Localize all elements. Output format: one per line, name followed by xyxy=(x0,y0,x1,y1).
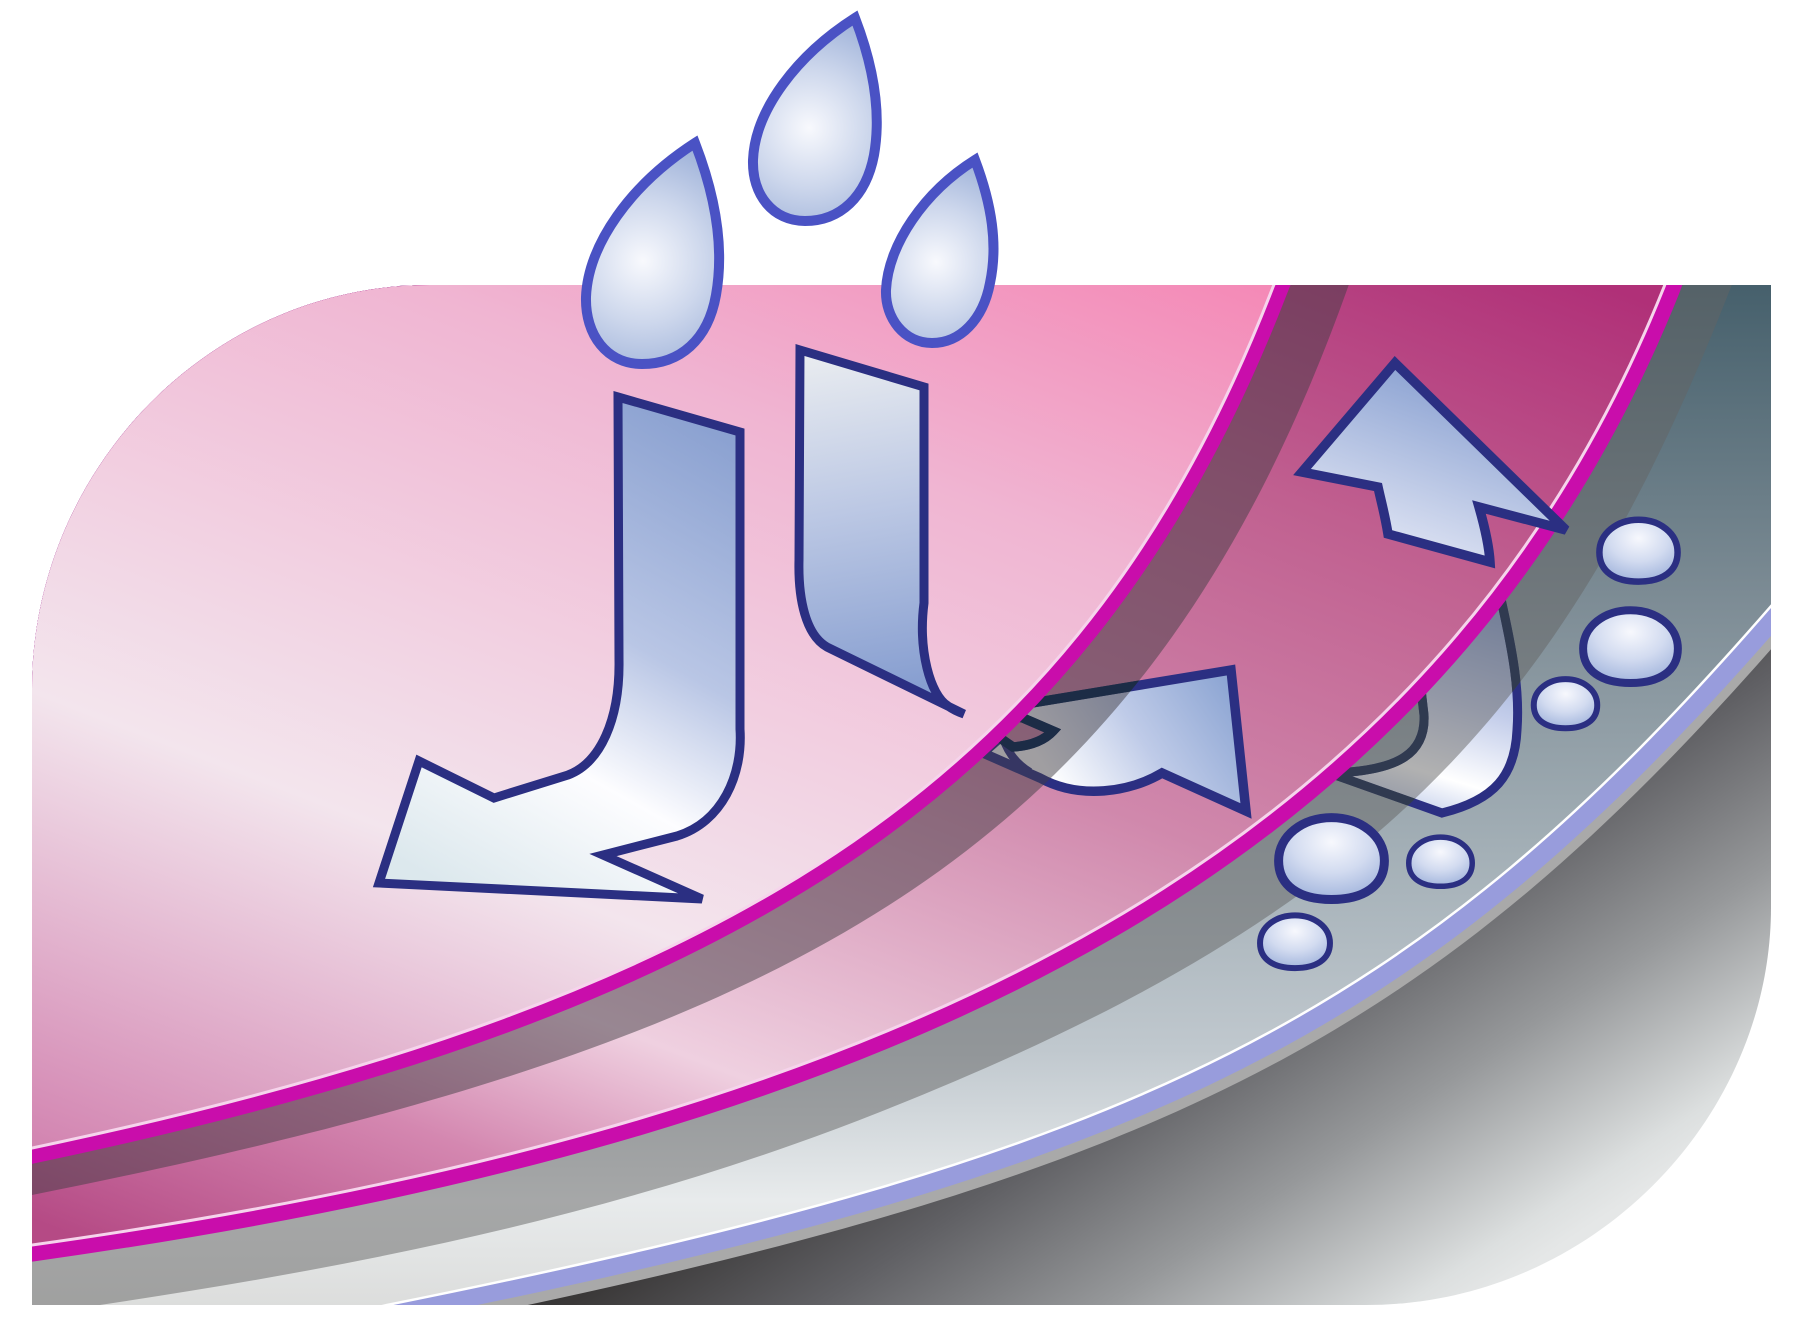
grey gradient layer with white edge xyxy=(10,255,1790,1309)
inner pink layer fill and pale edge line xyxy=(10,265,1282,1153)
icon: water drop left xyxy=(586,143,719,364)
icon: bubble 5 xyxy=(1409,837,1472,886)
arrow: upward arrow leaving the membrane xyxy=(1302,363,1566,562)
icon: bubble 2 xyxy=(1583,610,1678,683)
arrow outline darkened inside the pink shadow xyxy=(998,680,1140,752)
arrow: short curved arrow heading into the membrane xyxy=(799,350,964,714)
middle pink fill and pale edge line xyxy=(10,265,1672,1248)
arrow inner tail stroke xyxy=(1003,738,1030,772)
arrow: lower right, passing behind the membrane xyxy=(1335,585,1518,813)
arrow: centre right, passing behind the inner layer xyxy=(983,670,1246,811)
icon: bubble 3 xyxy=(1534,679,1597,728)
inner pink layer magenta edge xyxy=(10,265,1282,1153)
middle membrane magenta edge xyxy=(10,265,1672,1248)
shadow band over grey layer xyxy=(10,255,1745,1311)
icon: water drop top xyxy=(753,18,877,221)
lilac strip layer xyxy=(394,608,1771,1305)
icon: water drop right xyxy=(886,160,994,343)
icon: bubble 4 large xyxy=(1279,818,1384,900)
icon: bubble 6 xyxy=(1260,915,1330,968)
grey strip layer xyxy=(478,636,1771,1305)
arrow: large curved arrow pointing down-left xyxy=(379,397,740,899)
icon: bubble 1 xyxy=(1599,520,1678,582)
arrow outline darkened inside the grey shadow xyxy=(1335,585,1518,813)
shadow band over middle layer xyxy=(10,268,1355,1199)
